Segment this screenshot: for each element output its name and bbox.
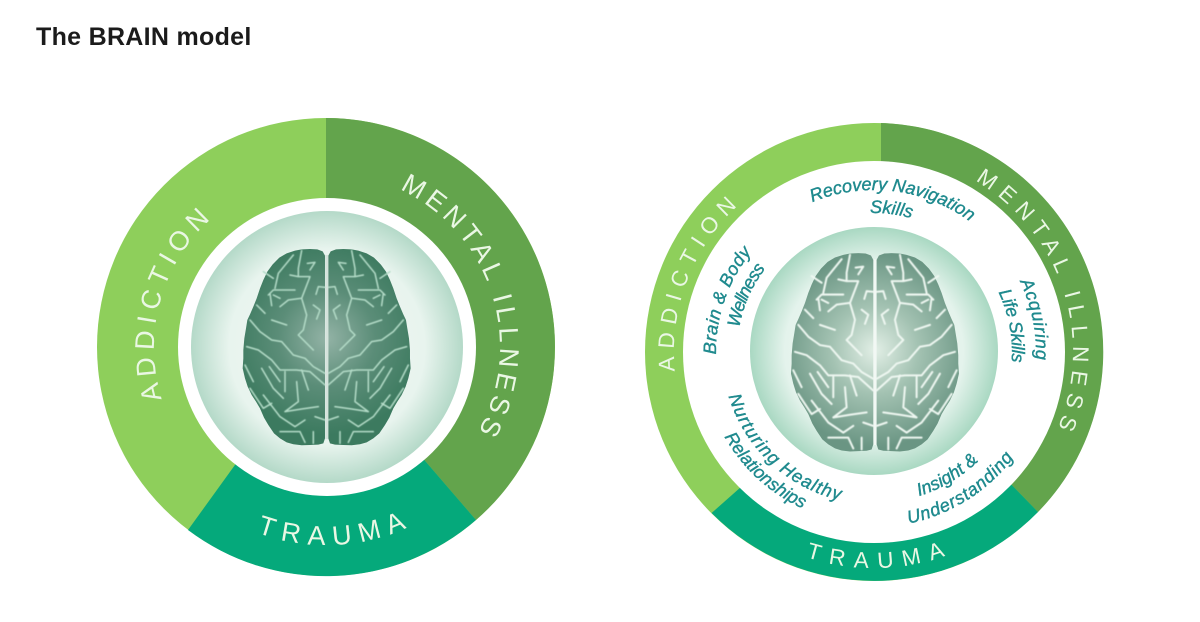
right diagram: ring with recovery skills and brain [645, 123, 1104, 581]
white inner ring [178, 198, 476, 496]
skill: recovery navigation skills: Skills [870, 200, 914, 218]
skill: insight and understanding: Understanding [908, 451, 1014, 523]
skill: acquiring life skills [998, 280, 1049, 362]
segment: trauma [712, 477, 1038, 581]
white skills band [683, 161, 1065, 543]
label: trauma: TRAUMA [262, 514, 407, 545]
skill: brain and body wellness: Wellness [727, 264, 764, 326]
skill: insight and understanding: Insight & [918, 454, 978, 496]
label: mental illness: MENTAL ILLNESS [402, 174, 519, 436]
segment: addiction [97, 118, 555, 576]
label: trauma: TRAUMA [810, 542, 946, 568]
skill: recovery navigation skills: Recovery Navigation [810, 178, 974, 221]
label: mental illness: MENTAL ILLNESS [976, 168, 1089, 431]
title: The BRAIN model [36, 23, 252, 51]
skill: acquiring life skills: Acquiring [1019, 280, 1049, 360]
skill: acquiring life skills: Life Skills [998, 290, 1026, 362]
left diagram: three-part ring with brain [97, 118, 555, 576]
segment: mental illness [874, 123, 1103, 512]
label: addiction: ADDICTION [135, 208, 209, 400]
segment: trauma [188, 455, 476, 576]
skill: nurturing healthy relationships: Nurturing Healthy [728, 394, 844, 502]
icon: brain [791, 253, 959, 451]
skill: nurturing healthy relationships: Relationships [724, 432, 806, 508]
inner gradient disc [191, 211, 463, 483]
skill: brain and body wellness: Brain & Body [703, 245, 750, 354]
inner gradient disc [750, 227, 998, 475]
icon: brain [243, 249, 411, 445]
segment: addiction [645, 123, 1103, 581]
label: addiction: ADDICTION [658, 196, 736, 372]
segment: mental illness [326, 118, 555, 520]
